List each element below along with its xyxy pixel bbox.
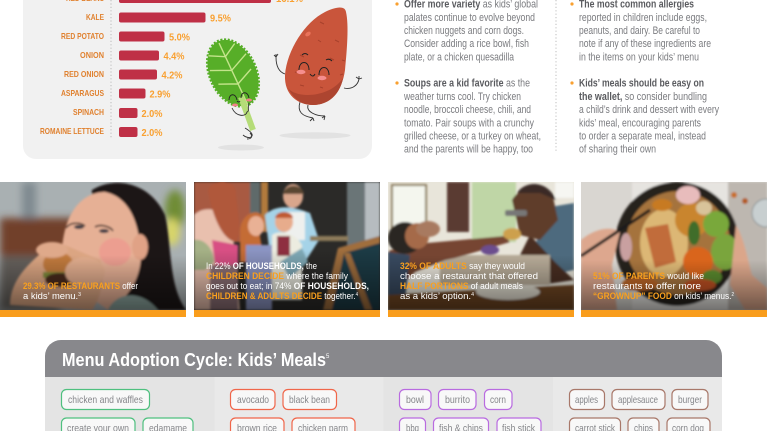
column: ubiquity tags (570, 390, 710, 431)
caption (23, 281, 138, 301)
caption: CHILDREN DECIDE where the family (206, 271, 348, 281)
caption: 2 (731, 292, 734, 298)
tip: soups: Soups are a kid favorite as the (404, 78, 530, 90)
caption: as a kids’ option. (400, 291, 468, 301)
tip: soups: weather turns cool. Try chicken (403, 91, 521, 103)
photo card: girl eating burger (0, 182, 186, 317)
panel: vegetable ranking chart (23, 0, 372, 159)
bar: red potato: RED POTATO (61, 31, 104, 41)
text column: menu tips right (570, 0, 719, 156)
caption: In 22% OF HOUSEHOLDS, the (206, 261, 317, 271)
column: adoption tags (230, 390, 355, 431)
bar: romaine lettuce: 2.0% (142, 127, 163, 139)
icon: kale character (197, 32, 269, 151)
footnote marker: 5 (326, 354, 330, 360)
caption: goes out to eat; in 74% OF HOUSEHOLDS, (206, 281, 369, 291)
bar: red onion (64, 69, 183, 82)
tip: offer more variety: chicken nuggets and corn dogs. (404, 25, 524, 37)
bar: kale (86, 12, 232, 24)
photo card: child feeding adult (388, 182, 574, 317)
tip: wallet: to order a separate meal, instead (579, 130, 706, 142)
caption: CHILDREN & ADULTS DECIDE together. (206, 291, 360, 301)
caption: a kids’ menu. (23, 291, 77, 301)
tip: allergies: in the items on your kids’ menu (579, 52, 699, 64)
bar: romaine lettuce: ROMAINE LETTUCE (40, 126, 104, 136)
tip: offer more variety: Consider adding a rice bowl, fish (404, 38, 529, 50)
bar: kale: 9.5% (210, 12, 232, 24)
column: proliferation tags: corn (490, 394, 506, 406)
column: ubiquity tags: apples (575, 394, 598, 406)
bar: kale: KALE (86, 12, 104, 22)
icon: sweet potato character (274, 7, 362, 139)
tip: wallet: a child’s drink and dessert with every (579, 104, 719, 116)
bar: romaine lettuce (40, 126, 163, 139)
text column: menu tips left (395, 0, 541, 156)
bar: red onion: RED ONION (64, 69, 104, 79)
bar: red onion: 4.2% (162, 70, 183, 82)
caption: restaurants to offer more (593, 281, 701, 291)
tip: wallet: the wallet, so consider bundling (579, 91, 707, 103)
caption (206, 261, 369, 301)
tip: soups: noodle, broccoli cheese, chili, and (404, 104, 531, 116)
bar: spinach: 2.0% (142, 108, 163, 120)
bar: asparagus (61, 88, 171, 100)
tip: soups: tomato. Pair soups with a crunchy (404, 118, 534, 130)
photo card: family outside restaurant (194, 181, 380, 317)
tip: wallet: of sharing their own (579, 144, 656, 156)
tip: soups: grilled cheese, or a turkey on wheat, (404, 130, 541, 142)
tip: allergies (570, 0, 711, 64)
bar: red potato: 5.0% (169, 32, 191, 44)
tip: allergies: reported in children include eggs, (579, 12, 707, 24)
column: inception tags: chicken and waffles (68, 394, 143, 406)
bar: onion: ONION (80, 50, 104, 60)
tip: allergies: note if any of these ingredients are (579, 38, 711, 50)
caption: 4 (356, 292, 358, 298)
tip: wallet (570, 78, 719, 156)
tip: wallet: Kids’ meals should be easy on (579, 78, 704, 90)
caption: 4 (471, 292, 474, 298)
column: inception tags (62, 390, 193, 431)
tip: allergies: peanuts, and dairy. Be careful to (579, 25, 700, 37)
bar: red potato (61, 31, 191, 44)
tip: soups (395, 78, 541, 156)
tip: soups: and the parents will be happy, too (404, 144, 533, 156)
caption: HALF PORTIONS of adult meals (400, 281, 523, 291)
tip: offer more variety: palates continue to evolve beyond (404, 12, 535, 24)
bar: spinach (73, 107, 163, 120)
column: ubiquity tags: applesauce (618, 394, 658, 406)
bar: asparagus: ASPARAGUS (61, 88, 104, 98)
column: adoption tags: black bean (289, 394, 330, 406)
bar: asparagus: 2.9% (150, 88, 171, 100)
panel: menu adoption cycle (45, 340, 722, 431)
bar: red beans (66, 0, 304, 5)
photo card: grown-up food bowl (581, 182, 767, 317)
bar: spinach: SPINACH (73, 107, 104, 117)
bar: onion: 4.4% (164, 50, 185, 62)
column: proliferation tags: bowl (406, 394, 424, 406)
caption: 51% OF PARENTS would like (593, 271, 704, 281)
caption: 29.3% OF RESTAURANTS offer (23, 281, 138, 291)
tip: offer more variety: plate, or a chicken quesadilla (404, 52, 515, 64)
column: proliferation tags (400, 390, 541, 431)
bar: onion (80, 50, 185, 62)
caption: 32% OF ADULTS say they would (400, 261, 525, 271)
caption: choose a restaurant that offered (400, 271, 538, 281)
column: ubiquity tags: burger (678, 394, 702, 406)
column: adoption tags: avocado (237, 394, 269, 406)
column: proliferation tags: burrito (445, 394, 470, 406)
caption: 3 (78, 292, 81, 298)
tip: offer more variety (395, 0, 538, 64)
heading: Menu Adoption Cycle: Kids’ Meals (62, 349, 326, 370)
caption: “GROWNUP” FOOD on kids’ menus. (593, 291, 738, 301)
tip: wallet: kids’ meal, encouraging parents (579, 118, 701, 130)
caption (400, 261, 538, 301)
caption (593, 271, 734, 301)
